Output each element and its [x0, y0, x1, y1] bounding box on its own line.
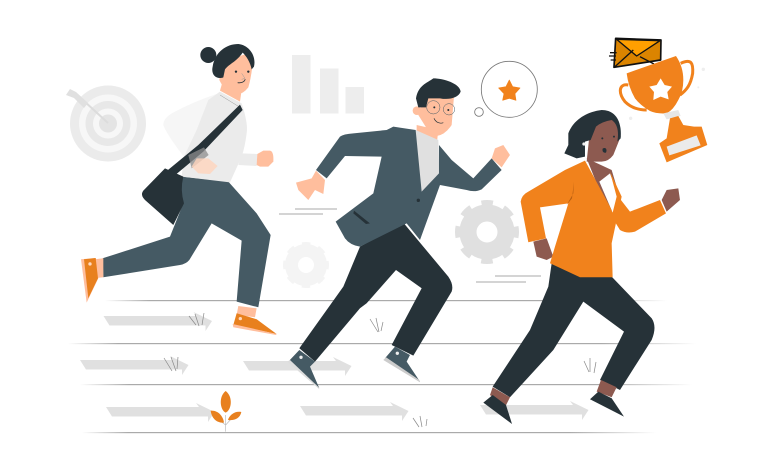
handles: [680, 61, 693, 95]
icon: target with arrow: [66, 86, 146, 162]
track lines: [68, 300, 696, 433]
head: [587, 116, 621, 162]
bag strap: [166, 105, 243, 177]
back foot: [490, 387, 510, 407]
grass tufts: [164, 313, 596, 427]
right sleeve: [612, 197, 666, 233]
glasses: [427, 101, 455, 115]
hands: [257, 151, 273, 167]
skin neckline: [587, 158, 617, 212]
hands: [296, 171, 325, 200]
trousers: [299, 223, 452, 362]
head: [413, 106, 421, 115]
speed lines: [279, 209, 541, 282]
hands: [533, 238, 553, 260]
back foot: [95, 258, 103, 278]
trousers: [493, 263, 654, 397]
front foot: [597, 380, 617, 397]
white shirt: [599, 173, 617, 213]
trousers: [103, 177, 271, 307]
stem and base: [659, 116, 707, 162]
plant: [211, 391, 241, 432]
person 2: man in suit with glasses: [287, 78, 510, 389]
thought bubble with star: [475, 61, 537, 117]
neck: [417, 125, 438, 145]
trophy: [620, 56, 707, 162]
shirt: [182, 92, 247, 182]
shirt: [402, 130, 439, 223]
icon: small gear: [286, 244, 326, 286]
front shoe: [385, 347, 420, 382]
neck and head: [220, 73, 242, 102]
back shoe: [288, 350, 319, 388]
bag: [142, 168, 184, 225]
track arrows: [80, 312, 588, 422]
back arm: [163, 93, 225, 170]
envelope icon: [609, 38, 661, 67]
suit jacket: [316, 127, 502, 247]
bar chart icon: [292, 55, 364, 114]
person 3: woman in orange blazer: [483, 110, 680, 424]
blazer: [521, 161, 622, 277]
icon: large gear: [458, 204, 516, 260]
cup: [627, 56, 683, 113]
front foot: [237, 306, 257, 317]
person 1: woman in white shirt with bag: [81, 44, 277, 335]
